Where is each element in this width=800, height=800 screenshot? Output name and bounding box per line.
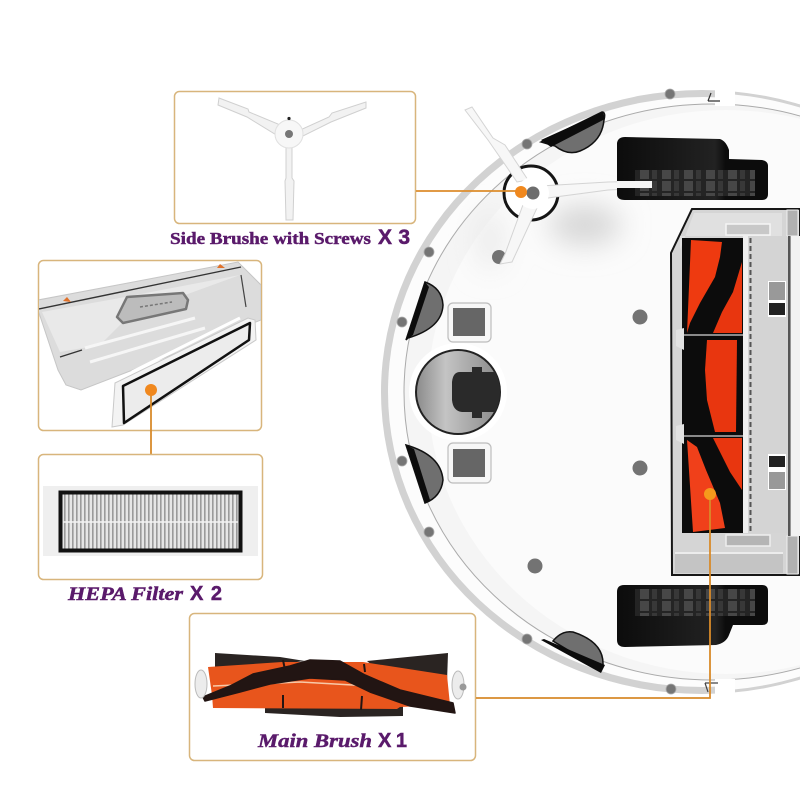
caster wheel (409, 349, 501, 435)
cliff sensor: upper left (406, 282, 443, 340)
main brush bay (671, 209, 800, 575)
robot body rim (381, 84, 800, 700)
panel: side brush (174, 92, 416, 224)
panel: dust bin (38, 260, 262, 430)
label: HEPA filter: X 2 (190, 583, 222, 605)
label: side brush (170, 226, 410, 249)
panel: main brush (190, 614, 476, 760)
icon: side brush (218, 98, 366, 220)
sensor window: lower (448, 443, 491, 483)
body screws (492, 250, 648, 574)
sensor window: upper (448, 303, 491, 342)
wheel: bottom (617, 585, 768, 647)
main brush illustration (195, 653, 466, 717)
cliff sensor: top (541, 112, 605, 153)
cliff sensor: bottom (541, 632, 605, 673)
main brush in bay (676, 238, 743, 533)
dust bin illustration (38, 262, 261, 427)
label: main brush: Main Brush (257, 731, 372, 752)
connector: main brush (476, 488, 716, 698)
connector: filter (145, 384, 157, 454)
label: main brush (257, 730, 407, 752)
label: HEPA filter: HEPA Filter (67, 584, 184, 605)
label: HEPA filter (67, 583, 222, 605)
side brush on robot (465, 107, 652, 264)
HEPA filter illustration (43, 486, 258, 556)
robot underside (381, 84, 800, 700)
panel: HEPA filter (38, 454, 262, 580)
rim screws (397, 89, 676, 694)
soft shadows (478, 205, 621, 270)
cliff sensor: lower left (406, 445, 443, 503)
connector: side brush (416, 186, 527, 198)
label: side brush: X 3 (378, 226, 410, 249)
label: side brush: Side Brushe with Screws (170, 229, 371, 248)
wheel: top (617, 137, 768, 200)
label: main brush: X 1 (378, 730, 407, 752)
